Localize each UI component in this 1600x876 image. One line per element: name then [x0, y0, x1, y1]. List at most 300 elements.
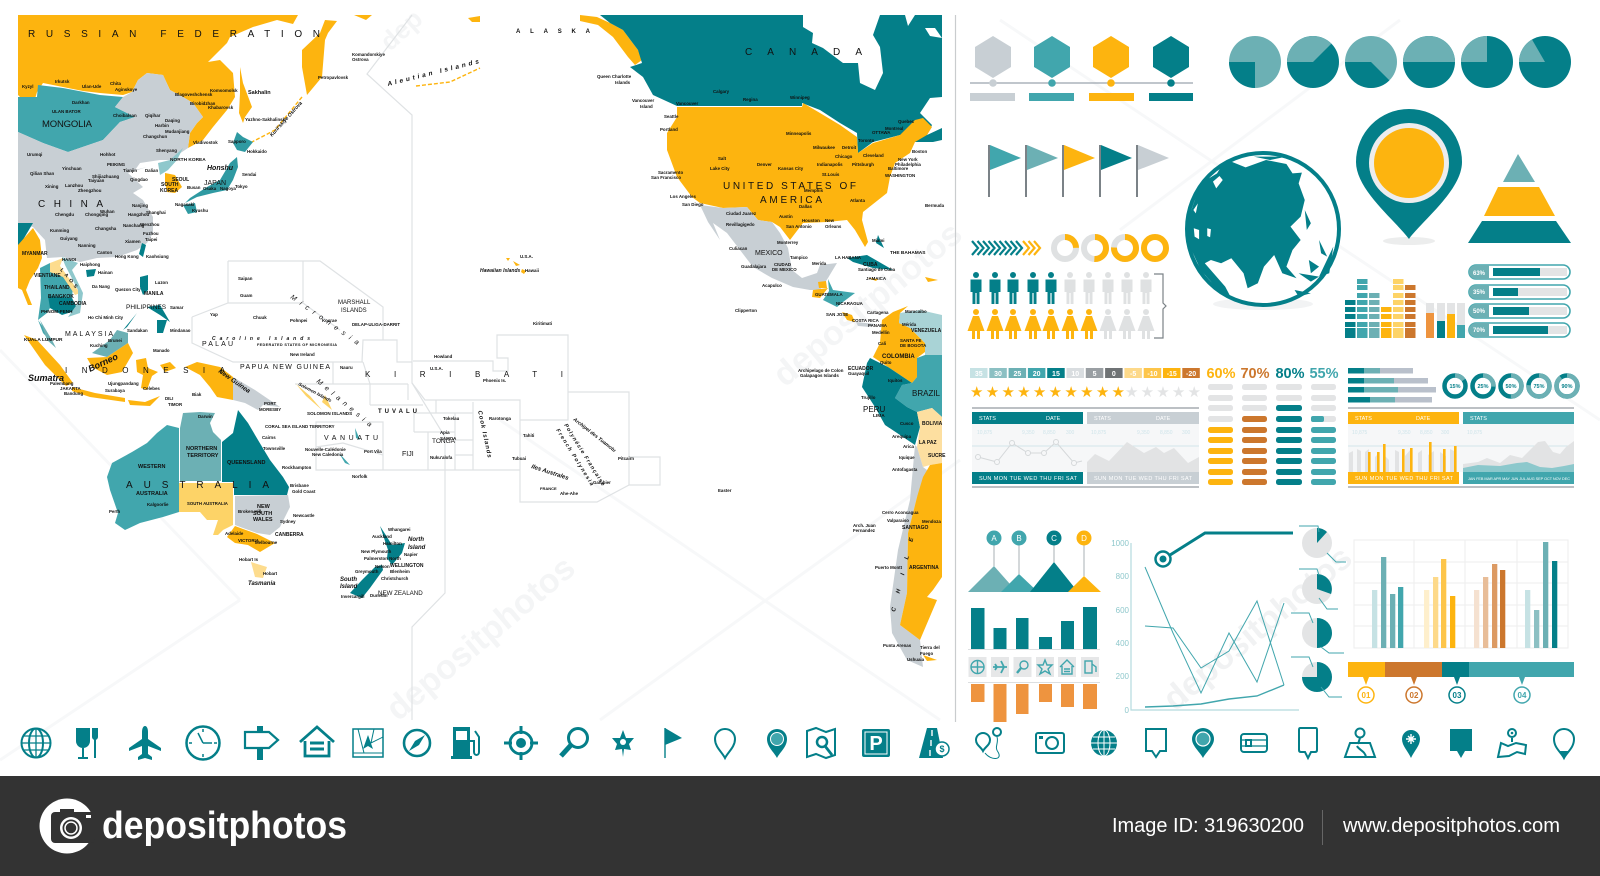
city labels: Pohnpei [290, 318, 307, 323]
city labels: Brisbane [290, 483, 309, 488]
icon row [22, 726, 1574, 760]
city labels: Boston [912, 149, 927, 154]
city labels: Cartagena [867, 310, 889, 315]
country labels: WALES [253, 517, 273, 523]
country labels: French Polynesia [554, 428, 594, 487]
city labels: Valparaiso [887, 518, 909, 523]
Mexico [700, 205, 837, 290]
line chart [1111, 533, 1299, 715]
city labels: Detroit [842, 145, 857, 150]
icon: flag [665, 728, 682, 758]
ABCD peaks [968, 530, 1101, 592]
gray table: SUN MON TUE WED THU FRI SAT [1094, 476, 1193, 482]
city labels: Aginskoye [115, 87, 138, 92]
city labels: New [825, 218, 835, 223]
progress sliders: 35% [1473, 290, 1486, 296]
city labels: Maracaibo [905, 309, 927, 314]
city labels: Qiqihar [145, 113, 161, 118]
city labels: Atlanta [850, 198, 865, 203]
city labels: New York [898, 157, 918, 162]
depositphotos logo: depositphotos [102, 805, 347, 847]
icon: globe [22, 728, 50, 758]
icon: house [300, 727, 334, 756]
Central America [812, 281, 855, 322]
city labels: Wuhan [100, 209, 115, 214]
city labels: Yinchuan [62, 166, 82, 171]
country labels: ECUADOR [848, 366, 874, 372]
city labels: Hong Kong [115, 254, 139, 259]
city labels: Hangzhou [128, 212, 150, 217]
country labels: QUEENSLAND [227, 460, 266, 466]
watermark: depositphotos [1156, 538, 1360, 718]
country labels: New Guinea [217, 368, 252, 395]
country labels: Micronesia [289, 294, 360, 347]
ABCD peaks: B [1016, 534, 1022, 543]
city labels: Chita [110, 81, 122, 86]
city labels: JAMAICA [866, 276, 887, 281]
icon: target [504, 726, 538, 760]
city labels: Philadelphia [895, 162, 921, 167]
city labels: Zhengzhou [78, 188, 102, 193]
city labels: Shanghai [146, 210, 166, 215]
chevron arrows [972, 241, 1040, 255]
city labels: SANTA FE [900, 338, 922, 343]
ABCD peaks: C [1051, 534, 1057, 543]
percent column chart: 55% [1309, 366, 1339, 382]
city labels: Galapagos Islands [800, 373, 839, 378]
Brazil [895, 355, 942, 417]
city labels: Kuching [90, 343, 108, 348]
city labels: Medellin [872, 330, 890, 335]
country labels: VANUATU [324, 435, 378, 442]
icon: filled pin [767, 729, 787, 758]
city labels: Kalgoorlie [147, 502, 169, 507]
country labels: FIJI [402, 451, 414, 458]
city labels: Fernandez [853, 528, 876, 533]
Myanmar [18, 228, 42, 305]
depositphotos logo [40, 798, 347, 854]
city labels: Kansas City [778, 166, 804, 171]
city labels: Sandakan [127, 328, 148, 333]
male people pictogram [970, 272, 1152, 304]
teal table: DATE [1046, 416, 1061, 422]
city labels: Qilian Shan [30, 171, 54, 176]
temperature scale: -5 [1130, 371, 1136, 378]
city labels: Lanzhou [65, 183, 83, 188]
segmented timeline bar: 03 [1453, 691, 1462, 700]
city labels: Pitcairn [618, 456, 634, 461]
country labels: BANGKOK [48, 294, 74, 300]
gray table: 10,875 [1091, 430, 1107, 436]
city labels: Mindanao [170, 328, 191, 333]
country labels: North [408, 537, 424, 543]
teal table: STATS [1470, 416, 1487, 422]
city labels: San Francisco [651, 175, 681, 180]
city labels: Kyzyl [22, 84, 33, 89]
country labels: THE BAHAMAS [890, 250, 926, 256]
donut percentages [1444, 376, 1578, 396]
equalizer chart [1345, 279, 1416, 338]
city labels: Apia [440, 430, 450, 435]
city labels: Blenheim [390, 569, 410, 574]
country labels: LIMA [873, 413, 885, 419]
city labels: Nanning [78, 243, 96, 248]
city labels: NICARAGUA [836, 301, 864, 306]
thermometer bars [1426, 303, 1465, 338]
city labels: Greymouth [355, 569, 379, 574]
city labels: Mendoza [922, 519, 941, 524]
city labels: Nouvelle-Calédonie [305, 447, 346, 452]
Vanuatu and New Caledonia [339, 428, 360, 465]
hexagon orange [1093, 36, 1129, 78]
city labels: Tahiti [523, 433, 534, 438]
city labels: Taiyuan [88, 178, 105, 183]
city labels: Nuku'alofa [430, 455, 453, 460]
Colombia [873, 306, 925, 383]
city labels: Christchurch [381, 576, 409, 581]
city labels: Tubuai [512, 456, 526, 461]
progress sliders: 50% [1473, 309, 1486, 315]
city labels: Komandorskiye [352, 52, 385, 57]
city labels: Hawaii [525, 268, 539, 273]
city labels: Chongqing [85, 212, 108, 217]
city labels: Guayaquil [848, 371, 869, 376]
city labels: Vladivostok [193, 140, 218, 145]
city labels: Yuzhno-Sakhalinsk [245, 117, 286, 122]
teal table: SUN MON TUE WED THU FRI SAT [979, 476, 1078, 482]
city labels: DELAP-ULIGA-DARRIT [352, 322, 400, 327]
city labels: Port Vila [364, 449, 382, 454]
city labels: COSTA RICA [852, 318, 880, 323]
Thailand and Cambodia [38, 263, 73, 343]
teal table: JAN FEB MAR APR MAY JUN JUL AUG SEP OCT NOV DEC [1468, 477, 1570, 481]
city labels: Canton [97, 250, 112, 255]
city labels: Tokelau [443, 416, 460, 421]
city labels: LA HABANA [835, 255, 862, 260]
city labels: WASHINGTON [885, 173, 915, 178]
country labels: PERU [863, 405, 885, 414]
stats panel left [972, 408, 1199, 487]
country labels: CHILE [891, 536, 916, 612]
icon: round pin [1192, 728, 1214, 758]
Papua New Guinea [233, 377, 280, 410]
city labels: Ujungpandang [108, 381, 139, 386]
city labels: Revillagigedo [726, 222, 755, 227]
city labels: JAKARTA [60, 386, 81, 391]
city labels: Nagasaki [175, 202, 194, 207]
segmented timeline bar: 01 [1362, 691, 1371, 700]
icon: toll road [919, 728, 949, 758]
city labels: DILI [165, 396, 173, 401]
country labels: SANTIAGO [902, 525, 928, 531]
city labels: Komsomolsk [210, 88, 238, 93]
city labels: Montreal [885, 126, 903, 131]
country labels: ALASKA [516, 29, 591, 35]
city labels: SAMOA [440, 436, 457, 441]
country labels: VIENTIANE [34, 273, 61, 279]
country labels: SOUTH AUSTRALIA [187, 501, 228, 506]
city labels: Trujillo [861, 395, 876, 400]
country labels: AMERICA [760, 195, 822, 206]
Taiwan and Hainan [86, 243, 146, 277]
teal table: 300 [1066, 430, 1075, 436]
temperature scale [970, 368, 1200, 378]
country labels: NEW ZEALAND [378, 590, 423, 597]
city labels: Antofagasta [892, 467, 918, 472]
teal table: 8,850 [1043, 430, 1056, 436]
watermark: depositphotos [379, 548, 583, 728]
city labels: Indianapolis [817, 162, 843, 167]
country labels: BOLIVIA [922, 421, 943, 427]
line chart: 600 [1116, 606, 1130, 615]
icon: gear pin [1402, 730, 1420, 758]
line chart: 200 [1116, 672, 1130, 681]
Bolivia [917, 408, 942, 467]
country labels: MANILA [144, 291, 164, 297]
country labels: PALAU [202, 341, 233, 348]
city labels: Norfolk [352, 474, 368, 479]
city labels: Iquique [899, 455, 915, 460]
city labels: Adelaide [225, 531, 244, 536]
city labels: Nanjing [132, 203, 148, 208]
city labels: Santiago de Cuba [858, 267, 896, 272]
Tibet edge teal [18, 223, 33, 245]
city labels: Whangarei [388, 527, 410, 532]
city labels: Guam [240, 293, 253, 298]
orange table: SUN MON TUE WED THU FRI SAT [1355, 476, 1454, 482]
city labels: Brunei [108, 338, 122, 343]
icon: signpost [245, 726, 278, 760]
city labels: Saipan [238, 276, 253, 281]
orange table: 10,875 [1352, 430, 1368, 436]
city labels: Los Angeles [670, 194, 697, 199]
country labels: VICTORIA [238, 538, 260, 543]
category icon strip [968, 650, 1100, 682]
icon: airplane [129, 726, 161, 760]
icon: clock [186, 726, 220, 760]
city labels: Portland [660, 127, 678, 132]
country labels [22, 29, 946, 612]
grouped bar chart [1354, 540, 1568, 648]
donut percentages: 15% [1449, 384, 1461, 390]
icon: pin on map [1345, 728, 1375, 757]
temperature scale: 0 [1112, 371, 1116, 378]
country labels: KOREA [160, 188, 178, 194]
icon: magnifier [561, 728, 588, 756]
city labels: Luzon [155, 280, 168, 285]
hexagon gray [975, 36, 1011, 78]
donut percentages: 90% [1561, 384, 1573, 390]
icon: card [1241, 734, 1267, 752]
city labels: DE BOGOTA [900, 343, 927, 348]
city labels: Mudanjiang [165, 129, 190, 134]
country labels: PHILIPPINES [126, 304, 167, 311]
country labels: MALAYSIA [65, 331, 113, 338]
city labels: Blagoveshchensk [175, 92, 213, 97]
city labels: Bermuda [925, 203, 945, 208]
target marker and leader [1156, 533, 1293, 566]
city labels: PANAMA [868, 323, 888, 328]
city labels: Cairns [262, 435, 276, 440]
city labels: Chicago [835, 154, 853, 159]
country labels: AUSTRALIA [136, 491, 168, 497]
city labels: Cleveland [863, 153, 884, 158]
city labels: Regina [743, 97, 758, 102]
country labels: Solomon Islands [298, 381, 333, 403]
city labels: Xining [45, 184, 59, 189]
city labels: Sacramento [658, 170, 683, 175]
line chart: 800 [1116, 572, 1130, 581]
teal table [1463, 412, 1574, 484]
icon: outline pin [715, 729, 735, 758]
city labels: Phoenix Is. [483, 378, 506, 383]
USA [667, 103, 932, 247]
city labels: Manado [153, 348, 170, 353]
donut percentages: 50% [1505, 384, 1517, 390]
country labels: ARGENTINA [909, 565, 939, 571]
city labels: CORAL SEA ISLAND TERRITORY [265, 424, 335, 429]
city labels: Hamilton [383, 541, 402, 546]
country labels: TUVALU [378, 409, 417, 415]
city labels: Memphis [804, 188, 824, 193]
icon: filled callout [1450, 729, 1472, 758]
stats panel right [1348, 408, 1574, 487]
country labels: Honshu [207, 165, 234, 172]
New Zealand [350, 526, 405, 598]
city labels: St.Louis [822, 172, 840, 177]
country labels: WESTERN [138, 464, 166, 470]
city labels: Austin [779, 214, 793, 219]
country labels: Hawaiian Islands [480, 268, 521, 274]
city labels: Osaka [203, 186, 217, 191]
Sakhalin [239, 67, 252, 123]
city labels: Harbin [155, 123, 169, 128]
city labels: Quezon City [115, 287, 141, 292]
temperature scale: 10 [1071, 371, 1079, 378]
country labels: TONGA [432, 438, 456, 445]
country labels: MONGOLIA [42, 119, 93, 130]
city labels: Hokkaido [247, 149, 267, 154]
country labels: Archipel des Tuamotu [571, 416, 617, 454]
teal table: 9,350 [1022, 430, 1035, 436]
gray table: 9,350 [1137, 430, 1150, 436]
city labels: Nanchang [123, 223, 145, 228]
city labels: Milwaukee [813, 145, 836, 150]
city labels: TIMOR [168, 402, 183, 407]
Kuril and Aleutian islands [252, 68, 480, 142]
gray table: STATS [1094, 416, 1111, 422]
city labels: Biak [192, 392, 202, 397]
icon: square callout outline [1146, 729, 1166, 757]
Australia northern territory [180, 412, 221, 481]
city labels: Howland [434, 354, 453, 359]
country labels: NORTHERN [186, 446, 217, 452]
country labels: SOLOMON ISLANDS [307, 411, 352, 416]
progress rings [1054, 237, 1166, 259]
city labels: Islands [615, 80, 631, 85]
Australia victoria [227, 526, 275, 552]
city labels: Kaohsiung [146, 254, 169, 259]
city labels: Puerto Montt [875, 565, 903, 570]
city labels: Surabaya [105, 388, 125, 393]
city labels: Winnipeg [790, 95, 810, 100]
city labels: Ho Chi Minh City [88, 315, 124, 320]
icon: camera [1036, 733, 1064, 753]
city labels: Birobidzhan [190, 101, 216, 106]
city labels: Tianjin [123, 168, 137, 173]
city labels: U.S.A. [520, 254, 533, 259]
city labels: Vancouver [676, 101, 698, 106]
icon: restaurant [76, 728, 97, 758]
Tasmania [251, 562, 267, 578]
Chile [890, 445, 927, 667]
segmented timeline bar: 04 [1518, 691, 1527, 700]
country labels: SOUTH [253, 511, 272, 517]
city labels: Daqing [165, 118, 180, 123]
city labels: Guadalajara [741, 264, 767, 269]
Japan [183, 132, 253, 214]
city labels: Pittsburgh [852, 162, 874, 167]
country labels: SOUTH [161, 182, 179, 188]
city labels: Ciudad Juarez [726, 211, 757, 216]
city labels: Kunming [50, 228, 69, 233]
city labels: Melbourne [255, 540, 278, 545]
gray table: 300 [1182, 430, 1191, 436]
progress sliders: 63% [1473, 271, 1486, 277]
city labels: MORESBY [259, 407, 281, 412]
city labels: Orleans [825, 224, 842, 229]
segmented timeline bar: 02 [1410, 691, 1419, 700]
city labels: Minneapolis [786, 131, 812, 136]
city labels: Townsville [263, 446, 286, 451]
icon: compass [404, 730, 430, 756]
icon: phone callout [1299, 728, 1317, 758]
city labels: Sendai [242, 172, 256, 177]
ABCD peaks: D [1081, 534, 1087, 543]
progress sliders [1469, 265, 1570, 337]
icon: map search [807, 728, 835, 758]
orange table: DATE [1416, 416, 1431, 422]
country labels: VENEZUELA [911, 328, 942, 334]
country labels: PHNOM-PENH [41, 309, 73, 314]
temperature scale: 25 [1013, 371, 1021, 378]
city labels: Dunedin [370, 593, 388, 598]
city labels: Lake City [710, 166, 730, 171]
percent column chart: 60% [1206, 366, 1236, 382]
city labels: Tierra del [920, 645, 940, 650]
Philippines [123, 275, 170, 333]
orange table: STATS [1355, 416, 1372, 422]
city labels: Irkutsk [55, 79, 70, 84]
pyramid [1468, 154, 1571, 243]
Australia south [179, 483, 233, 535]
icon: star pin [612, 730, 634, 757]
city labels: Qingdao [130, 177, 148, 182]
city labels: Vancouver [632, 98, 654, 103]
icon: parking: P [869, 733, 883, 755]
city labels: FRANCE [540, 486, 557, 491]
city labels: Nagoya [220, 186, 236, 191]
country labels: ISLANDS [341, 308, 367, 314]
Argentina [900, 463, 942, 640]
Caribbean islands [847, 235, 893, 270]
city labels: Denver [757, 162, 772, 167]
icon: solid globe [1091, 730, 1117, 756]
city labels: Samar [170, 305, 184, 310]
city labels: Mérida [902, 322, 917, 327]
city labels: Haiphong [80, 262, 101, 267]
percent column chart [1206, 366, 1339, 485]
